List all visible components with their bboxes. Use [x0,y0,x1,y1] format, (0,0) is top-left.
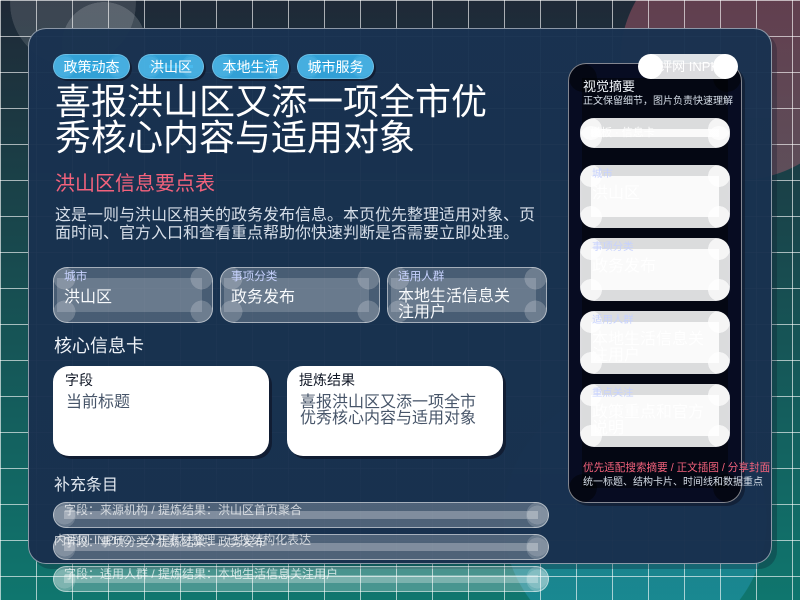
source pill: 内评网 INPHO [646,59,730,74]
tag: city service: 城市服务 [308,59,364,75]
tag: policy news: 政策动态 [64,59,120,75]
intro paragraph: 面时间、官方入口和查看重点帮助你快速判断是否需要立即处理。 [55,225,519,242]
background circle: top left small [62,2,146,86]
sidebar card: focus [580,384,730,447]
metric card: city [53,267,213,323]
background circle: bottom right blue [503,388,767,600]
row: category: 字段：事项分类 / 提炼结果：政务发布 [64,535,266,549]
sidebar card: city: 城市 [592,169,613,180]
metric card: category: 事项分类 [231,270,277,283]
core card: result: 喜报洪山区又添一项全市 [300,394,476,411]
intro paragraph: 这是一则与洪山区相关的政务发布信息。本页优先整理适用对象、页 [55,207,535,224]
tag row [53,54,376,81]
core card: result [287,366,503,456]
sidebar card: audience: 适用人群 [592,315,634,326]
sidebar card: template [580,118,730,148]
sidebar card: audience: 本地生活信息关 [592,331,704,348]
sidebar card: category: 事项分类 [592,242,634,253]
sidebar card: category: 政务发布 [592,258,656,275]
sidebar card: focus: 说明 [592,420,624,437]
tag: city service [297,54,374,79]
core card: result: 提炼结果 [299,372,355,388]
metric card: audience: 注用户 [398,304,446,321]
sidebar subheading: 正文保留细节，图片负责快速理解 [583,96,733,107]
row: audience [53,566,549,592]
sidebar card: audience: 注用户 [592,347,640,364]
footer note: 内评网 INPHO · 公开素材整理 · 已按结构化表达 [54,533,311,547]
title [55,81,487,158]
section heading: extra items: 补充条目 [54,477,118,494]
tag: district [138,54,204,79]
title: 秀核心内容与适用对象 [55,117,415,158]
sidebar card: audience [580,311,730,374]
metric card: audience: 适用人群 [398,270,444,283]
background circle: top right pink [620,0,800,180]
row: audience: 字段：适用人群 / 提炼结果：本地生活信息关注用户 [64,567,338,581]
metric card: city: 洪山区 [64,289,112,306]
metric card: category: 政务发布 [231,289,295,306]
source pill [638,54,738,79]
sidebar card: focus: 政策重点和官方 [592,404,704,421]
background circle: top left large [10,0,136,66]
metric card: city: 城市 [64,270,87,283]
row: source [53,502,549,528]
sidebar card: category [580,238,730,301]
core card: field: 字段 [65,372,93,388]
sidebar note: 统一标题、结构卡片、时间线和数据重点 [583,477,763,488]
sidebar card: city: 洪山区 [592,185,640,202]
row: category [53,534,549,560]
sidebar card: city [580,165,730,228]
tag: local life: 本地生活 [222,59,278,75]
tag: policy news [53,54,130,79]
tag: district: 洪山区 [150,59,192,75]
sidebar card: focus: 重点关注 [592,388,634,399]
tag: local life [212,54,289,79]
core card: field: 当前标题 [66,394,130,411]
intro paragraph [55,206,535,242]
metric card: audience [387,267,547,323]
section heading: core cards: 核心信息卡 [54,336,144,356]
title: 喜报洪山区又添一项全市优 [55,81,487,122]
metric card: category [220,267,380,323]
sidebar heading: 视觉摘要 [583,79,635,94]
row: source: 字段：来源机构 / 提炼结果：洪山区首页聚合 [64,503,302,517]
core card: result: 优秀核心内容与适用对象 [300,410,476,427]
metric card: audience: 本地生活信息关 [398,288,510,305]
panel: sidebar [568,63,742,503]
sidebar card: template: 模板 · 信息卡 [590,127,655,139]
core card: field [53,366,269,456]
sidebar accent text: 优先适配搜索摘要 / 正文插图 / 分享封面 [583,462,770,474]
subtitle: 洪山区信息要点表 [55,173,215,195]
